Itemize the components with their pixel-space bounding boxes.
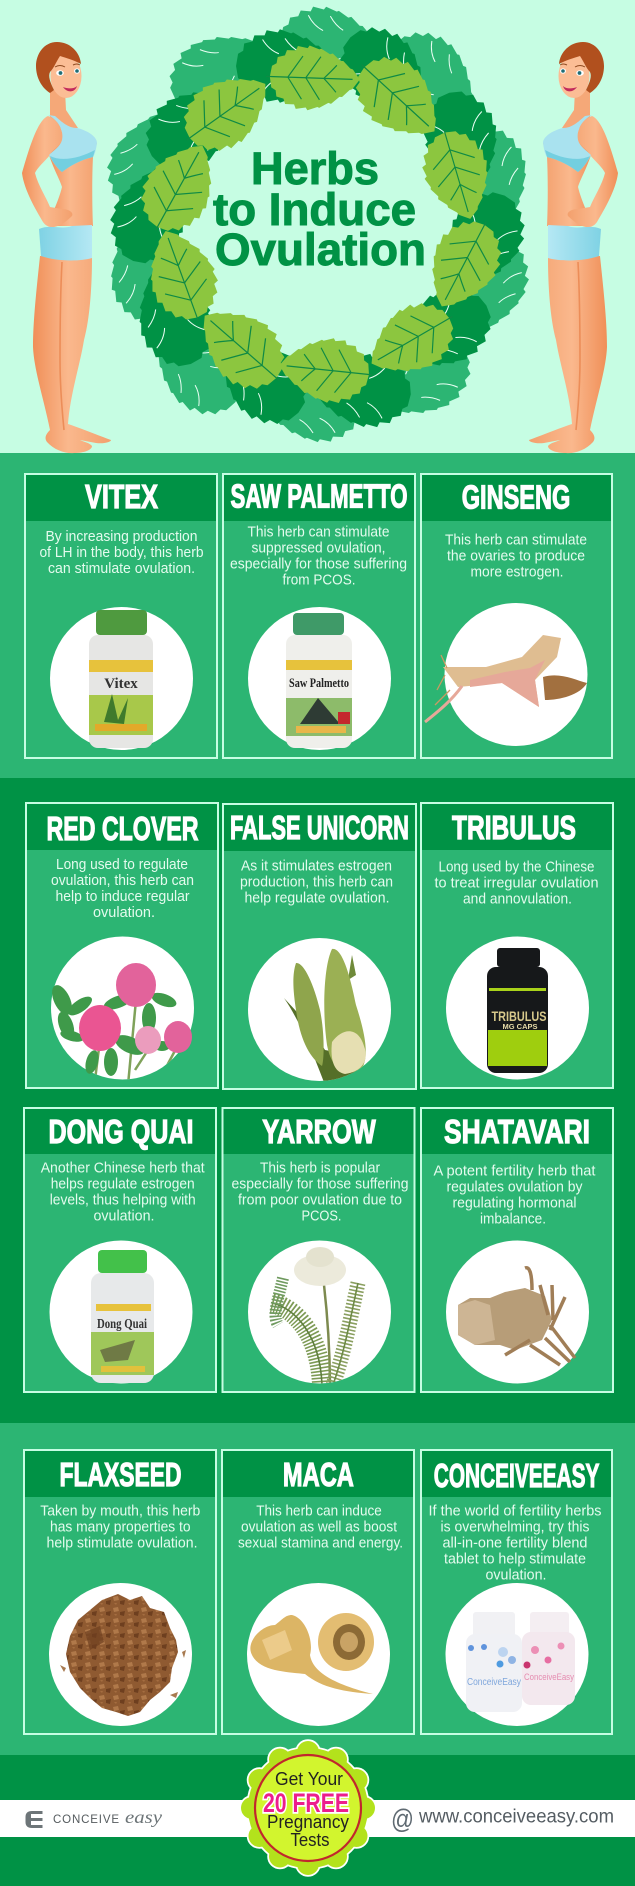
description: more estrogen. xyxy=(470,564,564,580)
url: www.conceiveeasy.com xyxy=(418,1806,614,1828)
photo circle xyxy=(50,607,193,750)
description: can stimulate ovulation. xyxy=(48,561,195,577)
heading bar xyxy=(223,1451,413,1497)
panel: Yarrow xyxy=(222,1108,414,1392)
description xyxy=(41,1161,205,1225)
heading bar xyxy=(25,1451,215,1497)
heading bar xyxy=(224,805,415,851)
description: of LH in the body, this herb xyxy=(40,545,204,561)
title: Ovulation xyxy=(215,224,426,275)
heading: Vitex: VITEX xyxy=(85,478,158,515)
photo circle xyxy=(444,603,588,746)
photo circle xyxy=(248,938,391,1081)
description xyxy=(232,1161,408,1225)
description: Taken by mouth, this herb xyxy=(40,1504,200,1520)
band: last herb row background xyxy=(0,1423,635,1755)
description xyxy=(238,1504,403,1552)
band: first herb row background xyxy=(0,453,635,778)
icon: ConceiveEasy bottles xyxy=(466,1612,575,1712)
description: help stimulate ovulation. xyxy=(46,1536,198,1552)
wreath: light inner leaves xyxy=(126,39,516,407)
badge text: 20 FREE xyxy=(263,1788,349,1818)
panel: Shatavari xyxy=(421,1108,613,1392)
description xyxy=(428,1504,602,1584)
description xyxy=(434,860,598,908)
badge text: Pregnancy xyxy=(267,1812,349,1832)
description: the ovaries to produce xyxy=(447,548,585,564)
description: Long used to regulate xyxy=(56,857,188,873)
photo circle xyxy=(247,1583,390,1726)
description: A potent fertility herb that xyxy=(434,1164,596,1180)
logo: Conceive Easy xyxy=(26,1807,162,1828)
badge text xyxy=(263,1769,349,1850)
title: Herbs xyxy=(251,143,379,194)
description: suppressed ovulation, xyxy=(252,540,386,556)
icon: yarrow plant xyxy=(272,1247,358,1390)
heading bar xyxy=(25,1109,215,1154)
description: production, this herb can xyxy=(240,874,393,890)
description: This herb is popular xyxy=(260,1161,380,1177)
panel: Dong Quai xyxy=(24,1108,216,1392)
description: has many properties to xyxy=(50,1520,191,1536)
description: sexual stamina and energy. xyxy=(238,1536,403,1552)
description: ovulation. xyxy=(93,905,155,921)
description: This herb can stimulate xyxy=(248,524,390,540)
photo circle xyxy=(51,936,194,1080)
icon: Dong Quai bottle xyxy=(91,1250,154,1383)
background: mint header xyxy=(0,0,635,453)
icon: shatavari powder and sticks xyxy=(458,1268,575,1365)
icon: maca roots xyxy=(250,1613,374,1694)
photo circle xyxy=(49,1583,192,1726)
photo circle xyxy=(248,1240,391,1384)
heading: Maca: MACA xyxy=(283,1456,354,1493)
icon: flaxseed pile xyxy=(60,1594,186,1716)
description: from poor ovulation due to xyxy=(238,1193,402,1209)
logo wordmark: CONCEIVE xyxy=(53,1814,119,1826)
photo circle xyxy=(446,1240,589,1384)
band: footer background xyxy=(0,1755,635,1886)
heading bar xyxy=(422,1109,612,1154)
illustration: right woman xyxy=(529,42,618,453)
description: and annovulation. xyxy=(463,892,572,908)
heading: Red Clover: RED CLOVER xyxy=(46,810,199,847)
icon: Vitex bottle: Vitex xyxy=(104,676,138,692)
icon: Tribulus bottle: TRIBULUS xyxy=(492,1008,546,1024)
heading: Dong Quai: DONG QUAI xyxy=(48,1113,194,1150)
heading bar xyxy=(422,475,611,521)
description xyxy=(445,532,587,580)
icon: ginseng root xyxy=(425,635,587,722)
badge text: Tests xyxy=(290,1830,330,1850)
icon: Saw Palmetto bottle: Saw Palmetto xyxy=(289,675,349,690)
description: levels, thus helping with xyxy=(50,1193,196,1209)
description: from PCOS. xyxy=(282,572,356,588)
photo circle xyxy=(248,607,391,750)
icon: Tribulus bottle xyxy=(487,948,548,1073)
icon: at sign: @ xyxy=(391,1804,414,1834)
heading bar xyxy=(422,1451,611,1497)
description: to treat irregular ovulation xyxy=(434,876,598,892)
description: help to induce regular xyxy=(56,889,190,905)
panel: Red Clover xyxy=(26,803,218,1088)
heading bar xyxy=(422,804,612,850)
band: middle herb rows background xyxy=(0,778,635,1423)
panel: Flaxseed xyxy=(24,1450,216,1734)
description: imbalance. xyxy=(480,1212,546,1228)
description: ovulation. xyxy=(94,1209,154,1225)
description: PCOS. xyxy=(302,1209,342,1225)
description: ovulation as well as boost xyxy=(241,1520,397,1536)
panel: Vitex xyxy=(25,474,217,758)
panel: ConceiveEasy xyxy=(421,1450,612,1734)
wreath: dark middle leaves xyxy=(99,11,538,440)
heading: Shatavari: SHATAVARI xyxy=(444,1113,590,1150)
icon: Vitex bottle xyxy=(89,610,153,748)
title xyxy=(213,143,426,275)
icon: red clover flowers xyxy=(48,963,192,1085)
description xyxy=(240,858,393,906)
panel: False Unicorn xyxy=(223,804,416,1089)
heading bar xyxy=(224,1109,414,1154)
icon: logo mark xyxy=(26,1811,42,1828)
panel: Tribulus xyxy=(421,803,613,1088)
description xyxy=(230,524,407,588)
badge: free pregnancy tests xyxy=(241,1741,375,1875)
description xyxy=(40,1504,200,1552)
description: Long used by the Chinese xyxy=(438,860,594,876)
icon: false unicorn spikes xyxy=(284,949,366,1085)
description xyxy=(40,529,204,577)
icon: Saw Palmetto bottle xyxy=(286,613,352,748)
description: If the world of fertility herbs xyxy=(428,1504,602,1520)
illustration: left woman xyxy=(22,42,111,453)
logo script: easy xyxy=(125,1807,162,1827)
heading: Tribulus: TRIBULUS xyxy=(452,809,576,846)
heading: False Unicorn: FALSE UNICORN xyxy=(230,809,409,846)
heading bar xyxy=(224,475,414,521)
description: regulates ovulation by xyxy=(446,1180,583,1196)
panel: Saw Palmetto xyxy=(223,474,415,758)
badge text: Get Your xyxy=(275,1769,343,1789)
description: helps regulate estrogen xyxy=(51,1177,195,1193)
icon: Tribulus bottle: MG CAPS xyxy=(502,1022,538,1031)
description: ovulation. xyxy=(486,1568,546,1584)
description: By increasing production xyxy=(46,529,198,545)
illustration: leaf wreath xyxy=(96,3,540,444)
icon: ConceiveEasy bottles: ConceiveEasy xyxy=(467,1677,521,1688)
icon: ConceiveEasy bottles: ConceiveEasy xyxy=(524,1672,574,1682)
panel: Ginseng xyxy=(421,474,612,758)
description: tablet to help stimulate xyxy=(444,1552,586,1568)
description: is overwhelming, try this xyxy=(440,1520,590,1536)
heading bar xyxy=(27,804,217,850)
description: Another Chinese herb that xyxy=(41,1161,205,1177)
description: regulating hormonal xyxy=(452,1196,576,1212)
description: especially for those suffering xyxy=(232,1177,408,1193)
photo circle xyxy=(50,1240,192,1384)
heading: Flaxseed: FLAXSEED xyxy=(60,1456,182,1493)
description xyxy=(434,1164,596,1228)
description: especially for those suffering xyxy=(230,556,407,572)
description: This herb can stimulate xyxy=(445,532,587,548)
wreath: outer leaves xyxy=(96,3,540,444)
title: to Induce xyxy=(213,184,416,235)
panel: Maca xyxy=(222,1450,414,1734)
description: As it stimulates estrogen xyxy=(241,858,392,874)
heading: Saw Palmetto: SAW PALMETTO xyxy=(230,478,408,514)
description: all-in-one fertility blend xyxy=(442,1536,588,1552)
description: help regulate ovulation. xyxy=(244,890,390,906)
heading bar xyxy=(26,475,216,521)
description: This herb can induce xyxy=(256,1504,382,1520)
heading: Ginseng: GINSENG xyxy=(462,478,570,516)
heading: Yarrow: YARROW xyxy=(262,1113,376,1150)
photo circle xyxy=(446,1583,588,1726)
footer: white band xyxy=(0,1800,635,1837)
description: ovulation, this herb can xyxy=(51,873,194,889)
website address xyxy=(391,1804,614,1834)
description xyxy=(51,857,194,921)
photo circle xyxy=(446,936,589,1080)
icon: Dong Quai bottle: Dong Quai xyxy=(97,1317,147,1332)
